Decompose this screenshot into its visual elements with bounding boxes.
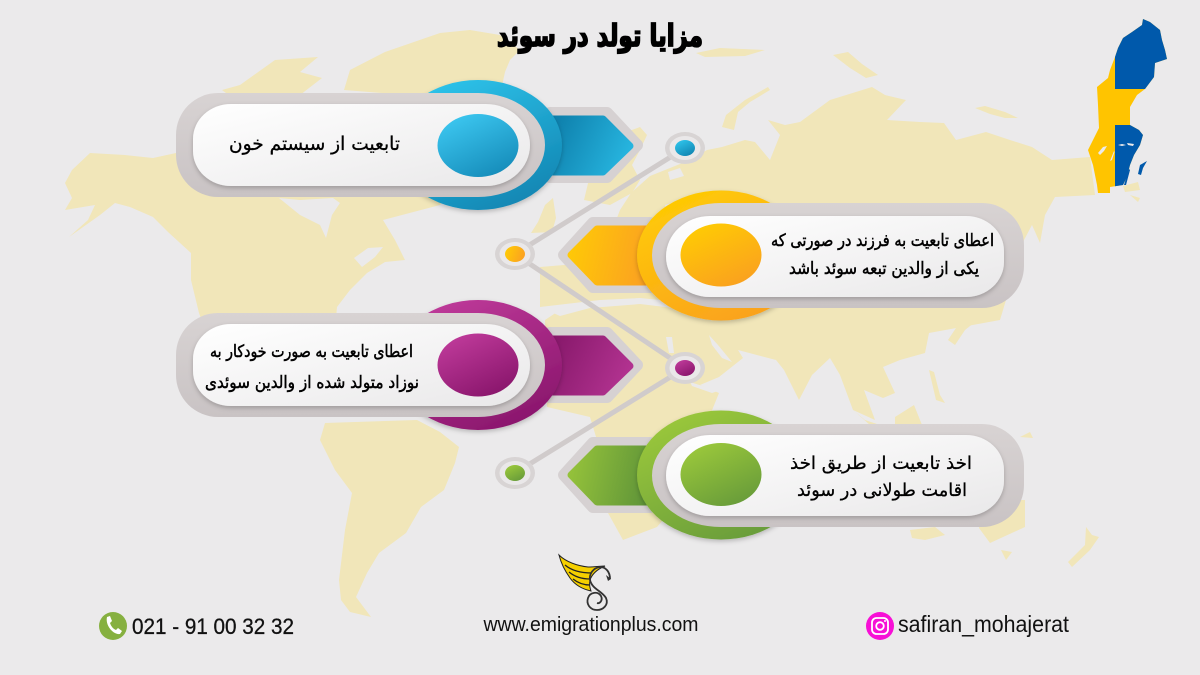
pill: white xyxy=(193,104,530,186)
arrow: purple xyxy=(550,333,637,397)
ring: blue xyxy=(394,80,562,210)
ring: yellow xyxy=(637,190,805,320)
text: card 4 xyxy=(790,453,972,501)
text: card 2 xyxy=(771,231,994,279)
text: card 4: اخذ تابعیت از طریق اخذ xyxy=(790,453,972,474)
panel: card 1 blue xyxy=(176,80,637,210)
circle: yellow xyxy=(680,224,762,286)
pill: gray frame xyxy=(176,93,545,197)
ring: purple xyxy=(394,300,562,430)
text: card 2: یکی از والدین تبعه سوئد باشد xyxy=(789,259,979,279)
contact: phone xyxy=(99,612,294,640)
contact: instagram xyxy=(866,611,1070,640)
connector lines xyxy=(515,148,685,473)
circle: blue xyxy=(438,114,518,177)
ring: green xyxy=(637,410,805,540)
icon: phone xyxy=(99,612,127,640)
website: www.emigrationplus.com xyxy=(483,614,698,636)
panel: card 4 green xyxy=(564,410,1024,540)
icon: instagram xyxy=(866,612,894,640)
arrow: blue xyxy=(550,113,637,177)
circle: purple xyxy=(438,334,518,396)
pill: white xyxy=(193,324,530,406)
icon: Sweden flag map xyxy=(1088,19,1167,193)
icon: Oland xyxy=(1124,169,1130,185)
pill: gray frame xyxy=(652,203,1024,308)
panel: card 3 purple xyxy=(176,300,637,430)
text: card 3 xyxy=(205,342,419,393)
arrow: green xyxy=(564,443,650,507)
arrow: yellow xyxy=(564,223,650,287)
panel: card 2 yellow xyxy=(564,190,1024,320)
circle: green xyxy=(680,443,762,506)
pill: white xyxy=(666,435,1004,516)
logo: winged S xyxy=(559,555,611,610)
pill: gray frame xyxy=(652,424,1024,527)
icon: Gotland xyxy=(1138,161,1147,175)
text: card 1: تابعیت از سیستم خون xyxy=(229,133,400,155)
text: phone number: 021 - 91 00 32 32 xyxy=(132,614,294,639)
node: yellow xyxy=(495,238,535,270)
title: مزایا تولد در سوئد xyxy=(497,19,703,54)
pill: gray frame xyxy=(176,313,545,417)
pill: white xyxy=(666,216,1004,297)
text: card 2: اعطای تابعیت به فرزند در صورتی که xyxy=(771,231,994,251)
sea gaps xyxy=(279,168,732,393)
text: instagram handle: safiran_mohajerat xyxy=(898,611,1070,637)
text: card 4: اقامت طولانی در سوئد xyxy=(797,480,967,501)
node: green xyxy=(495,457,535,489)
node: purple xyxy=(665,352,705,384)
text: card 3: اعطای تابعیت به صورت خودکار به xyxy=(210,342,413,362)
node: blue xyxy=(665,132,705,164)
world map background xyxy=(65,30,1140,617)
text: card 3: نوزاد متولد شده از والدین سوئدی xyxy=(205,373,419,393)
